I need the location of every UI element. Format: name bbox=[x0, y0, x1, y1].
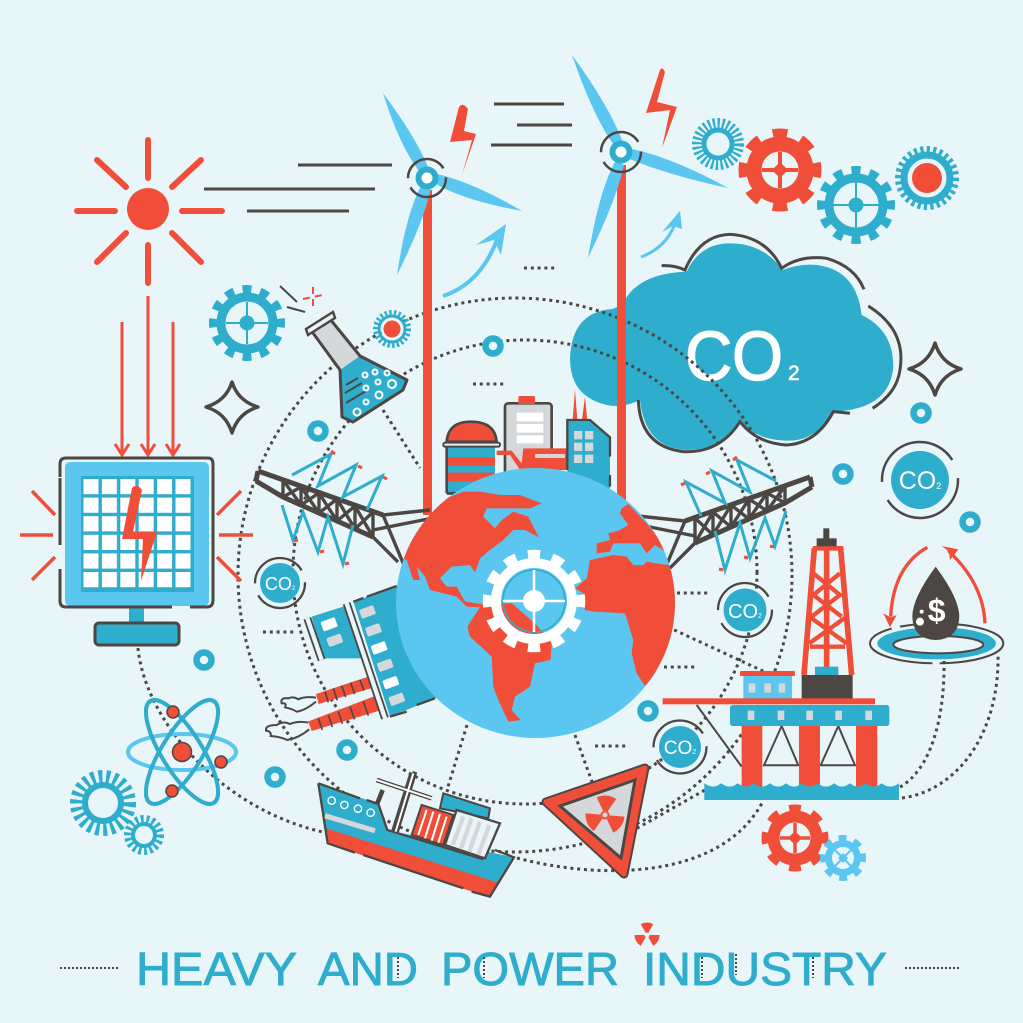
wind lines left bbox=[204, 165, 392, 211]
title dotted rule right bbox=[905, 967, 960, 969]
title: INDUSTRY bbox=[643, 943, 887, 995]
title: AND bbox=[318, 943, 418, 995]
dotted connection lines bbox=[138, 268, 998, 871]
tall battery tank bbox=[505, 396, 552, 477]
gear red top bbox=[740, 130, 820, 210]
red container bbox=[412, 805, 453, 845]
grey container bbox=[445, 810, 500, 858]
gear sunburst small bottom left bbox=[130, 820, 158, 850]
chimneys bbox=[308, 676, 382, 731]
arrow blue 1 bbox=[443, 224, 506, 296]
triangles and brace bbox=[697, 705, 855, 767]
gear sunburst teal bbox=[700, 126, 736, 162]
panel glow rays bbox=[20, 491, 253, 581]
red spark bbox=[303, 287, 323, 307]
gear sun red centre bbox=[900, 151, 954, 205]
title bbox=[136, 943, 887, 995]
gear teal top left bbox=[209, 285, 285, 361]
gear teal right bbox=[818, 167, 894, 243]
CO2 badge right bbox=[718, 583, 772, 637]
gear sunburst large bottom left bbox=[79, 779, 127, 827]
factory bbox=[266, 585, 443, 740]
rig legs bbox=[742, 725, 877, 788]
cargo ship bbox=[318, 772, 514, 897]
derrick tower bbox=[804, 548, 852, 675]
drop bbox=[912, 567, 959, 640]
oil rig bbox=[663, 528, 899, 800]
title: HEAVY bbox=[136, 943, 297, 995]
flask bbox=[306, 312, 407, 422]
water bbox=[704, 783, 899, 800]
CO2 badge left: CO2 bbox=[265, 574, 296, 594]
solar bolt bbox=[122, 486, 157, 581]
rear container bbox=[440, 793, 490, 818]
red deck bbox=[663, 698, 875, 704]
pylon right bbox=[638, 457, 812, 576]
CO2 badge lower bbox=[654, 720, 706, 774]
smoke bbox=[266, 697, 316, 740]
gear small red centre bbox=[376, 314, 408, 344]
solar panel monitor bbox=[60, 458, 213, 645]
CO2 badge left bbox=[255, 558, 305, 608]
teal building with chimneys bbox=[567, 389, 610, 493]
rig quarters bbox=[740, 671, 795, 699]
sparks bbox=[280, 286, 305, 312]
star right bbox=[909, 343, 961, 395]
teal deck bbox=[730, 705, 889, 726]
ring dots bbox=[196, 338, 978, 784]
globe bbox=[393, 468, 680, 738]
radiation warning triangle bbox=[546, 768, 645, 874]
CO2 cloud bbox=[570, 234, 901, 452]
gear red bottom bbox=[763, 806, 827, 870]
sun ray arrows bbox=[115, 296, 180, 455]
oil drop and pool bbox=[870, 546, 1003, 663]
cloud label: CO bbox=[685, 317, 783, 395]
radiation symbol bbox=[589, 799, 621, 831]
CO2 badge large bbox=[880, 440, 960, 520]
wind lines right bbox=[491, 104, 572, 145]
CO2 badge lower: CO2 bbox=[664, 738, 696, 759]
continents bbox=[393, 492, 680, 722]
dollar sign: $ bbox=[928, 593, 946, 629]
cycle arrows bbox=[883, 546, 985, 627]
gear blue bottom bbox=[821, 836, 865, 880]
hull bbox=[318, 783, 513, 897]
low red building bbox=[497, 448, 567, 470]
CO2 badge large: CO2 bbox=[899, 467, 941, 495]
CO2 badge right: CO2 bbox=[728, 601, 762, 623]
star left bbox=[206, 382, 258, 433]
title dotted rule left bbox=[60, 967, 118, 969]
title: POWER bbox=[441, 943, 619, 995]
arrow blue 2 bbox=[641, 211, 682, 257]
wind turbine 1 bbox=[383, 93, 522, 515]
sun bbox=[77, 140, 222, 283]
pylon left bbox=[256, 451, 430, 570]
lightning bolt 1 bbox=[450, 105, 476, 175]
wind turbine 2 bbox=[572, 55, 728, 500]
lightning bolt 2 bbox=[646, 68, 677, 148]
atom bbox=[128, 691, 236, 813]
refinery on globe bbox=[443, 389, 610, 495]
storage tank bbox=[443, 422, 500, 495]
main block bbox=[353, 585, 443, 717]
left wing bbox=[312, 605, 367, 658]
cloud label: 2 bbox=[788, 362, 800, 385]
crane bbox=[377, 772, 432, 832]
pool bbox=[870, 623, 1003, 663]
globe gear bbox=[482, 549, 586, 653]
title radiation icon bbox=[637, 925, 657, 945]
